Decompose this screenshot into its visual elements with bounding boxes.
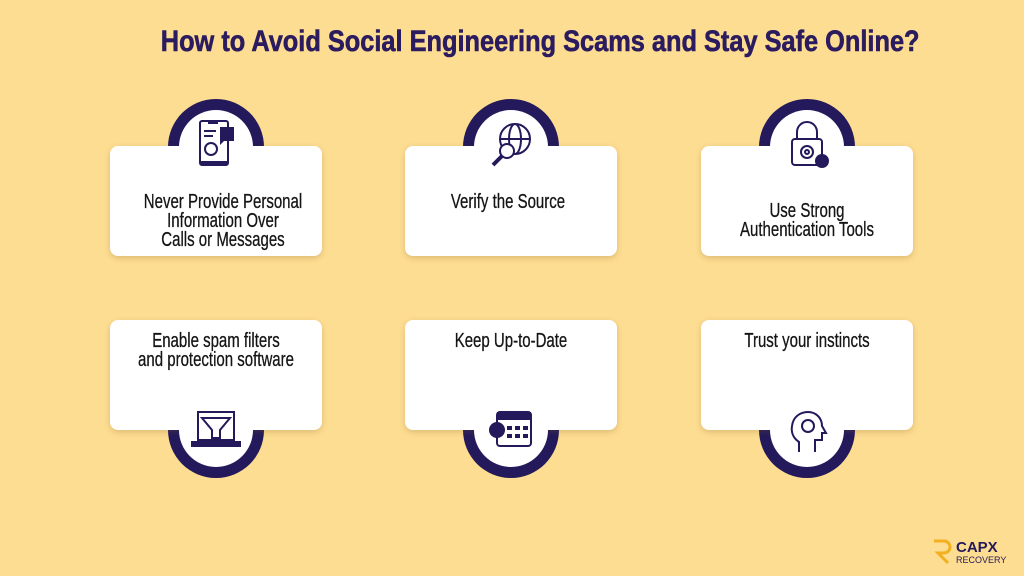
title: How to Avoid Social Engineering Scams and Stay Safe Online? [161,25,920,58]
panel: verify source: Verify the Source [451,191,565,213]
ring: card5 [463,382,559,478]
ring: card4 [168,382,264,478]
ring: card6 [759,382,855,478]
icon: phone with message [199,120,234,166]
panel: spam filters: and protection software [138,349,294,371]
inner circle 5 [474,393,548,467]
icon: globe magnifier [492,123,531,166]
panel: strong authentication [701,146,913,256]
panel: never provide personal info: Information Over [167,210,279,232]
inner circle 1 [179,110,253,184]
panel: strong authentication: Authentication Tools [740,219,874,241]
panel: verify source [405,146,617,256]
icon: calendar [489,411,532,447]
panel: strong authentication: Use Strong [769,200,845,222]
ring: card3 [759,99,855,195]
panel: never provide personal info: Never Provide Personal [144,191,302,213]
ring: card2 [463,99,559,195]
panel: trust instincts: Trust your instincts [744,330,870,352]
icon: lock fingerprint [791,121,829,168]
panel: keep up to date [405,320,617,430]
logo [934,539,1006,565]
panel: trust instincts [701,320,913,430]
inner circle 2 [474,110,548,184]
ring: card1 [168,99,264,195]
logo: CAPX [956,539,998,556]
icon: head with check [790,411,828,452]
panel: spam filters [110,320,322,430]
inner circle 6 [770,393,844,467]
icon: laptop filter [191,411,241,447]
panel: keep up to date: Keep Up-to-Date [455,330,567,352]
panel: never provide personal info: Calls or Messages [161,229,285,251]
panel: never provide personal info [110,146,322,256]
inner circle 4 [179,393,253,467]
panel: spam filters: Enable spam filters [152,330,280,352]
inner circle 3 [770,110,844,184]
logo: RECOVERY [956,555,1006,565]
